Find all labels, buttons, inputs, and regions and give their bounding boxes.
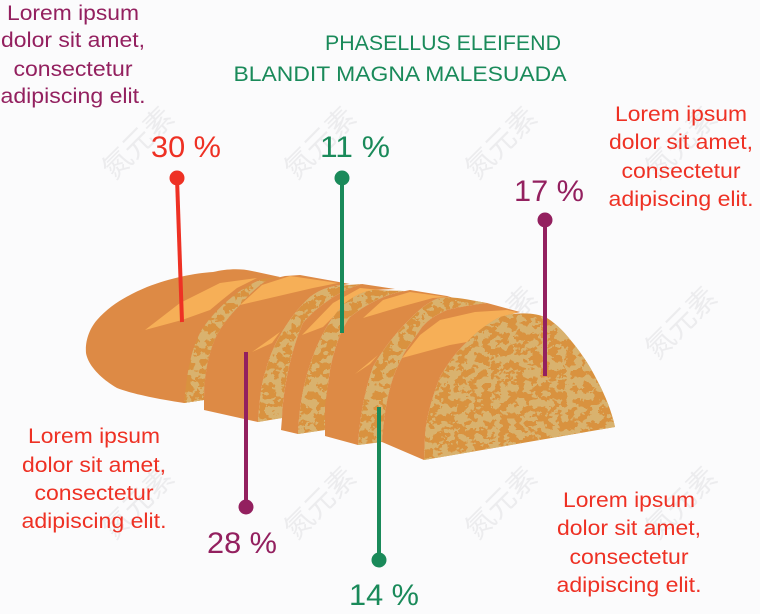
text block: bottom left: Lorem ipsum	[28, 425, 160, 448]
bread slice 5	[382, 303, 520, 460]
text block: bottom right: Lorem ipsum	[563, 489, 695, 512]
text block: bottom left: consectetur	[34, 482, 154, 505]
watermarks: 氮元素	[278, 461, 363, 546]
pointer: 30 %: 30 %	[151, 131, 221, 164]
watermarks	[96, 101, 724, 546]
watermarks: 氮元素	[459, 101, 544, 186]
pointer: 28 %	[207, 352, 277, 560]
watermarks: 氮元素	[639, 461, 724, 546]
title: BLANDIT MAGNA MALESUADA	[234, 63, 566, 86]
crumb face 1	[184, 277, 280, 403]
bread slice 2	[204, 275, 350, 422]
text block: bottom right: adipiscing elit.	[556, 574, 702, 597]
watermarks: 氮元素	[96, 101, 181, 186]
text block: top right: adipiscing elit.	[608, 188, 754, 211]
text block: bottom right	[556, 489, 702, 597]
text block: top left: Lorem ipsum	[7, 2, 139, 25]
illustration: sliced bread	[86, 269, 620, 463]
text block: bottom right: dolor sit amet,	[557, 517, 701, 540]
text block: top left: dolor sit amet,	[1, 29, 145, 52]
text block: top left: consectetur	[14, 58, 133, 81]
text block: bottom left	[22, 425, 166, 533]
pointer: 17 %: 17 %	[514, 175, 584, 208]
pointer: 11 %	[320, 131, 390, 333]
watermarks: 氮元素	[639, 101, 724, 186]
crumb face 5	[420, 308, 620, 463]
crumb face 4	[355, 293, 490, 448]
title	[234, 32, 566, 86]
bread slice 4	[325, 290, 470, 445]
crumb face 3	[295, 285, 407, 437]
watermarks: 氮元素	[278, 101, 363, 186]
pointer: 17 %	[514, 175, 584, 376]
crumb face 2	[258, 284, 362, 422]
text block: bottom right: consectetur	[570, 546, 689, 569]
watermarks: 氮元素	[96, 281, 181, 366]
pointer: 14 %: 14 %	[349, 579, 419, 612]
text block: top right: Lorem ipsum	[615, 103, 747, 126]
text block: top right: consectetur	[622, 160, 741, 183]
pointer: 11 %: 11 %	[320, 131, 390, 164]
pointer: 14 %	[349, 407, 419, 612]
watermarks: 氮元素	[278, 281, 363, 366]
title: PHASELLUS ELEIFEND	[325, 32, 561, 55]
text block: top left	[0, 2, 146, 108]
watermarks: 氮元素	[459, 461, 544, 546]
text block: top right	[608, 103, 754, 211]
pointer: 28 %: 28 %	[207, 527, 277, 560]
pointer: 30 %	[151, 131, 221, 322]
bread left end	[86, 269, 280, 403]
text block: bottom left: adipiscing elit.	[22, 510, 166, 533]
text block: top left: adipiscing elit.	[0, 85, 146, 108]
watermarks: 氮元素	[639, 281, 724, 366]
text block: bottom left: dolor sit amet,	[22, 454, 166, 477]
watermarks: 氮元素	[459, 281, 544, 366]
watermarks: 氮元素	[96, 461, 181, 546]
bread slice 3	[281, 284, 395, 434]
text block: top right: dolor sit amet,	[609, 131, 753, 154]
